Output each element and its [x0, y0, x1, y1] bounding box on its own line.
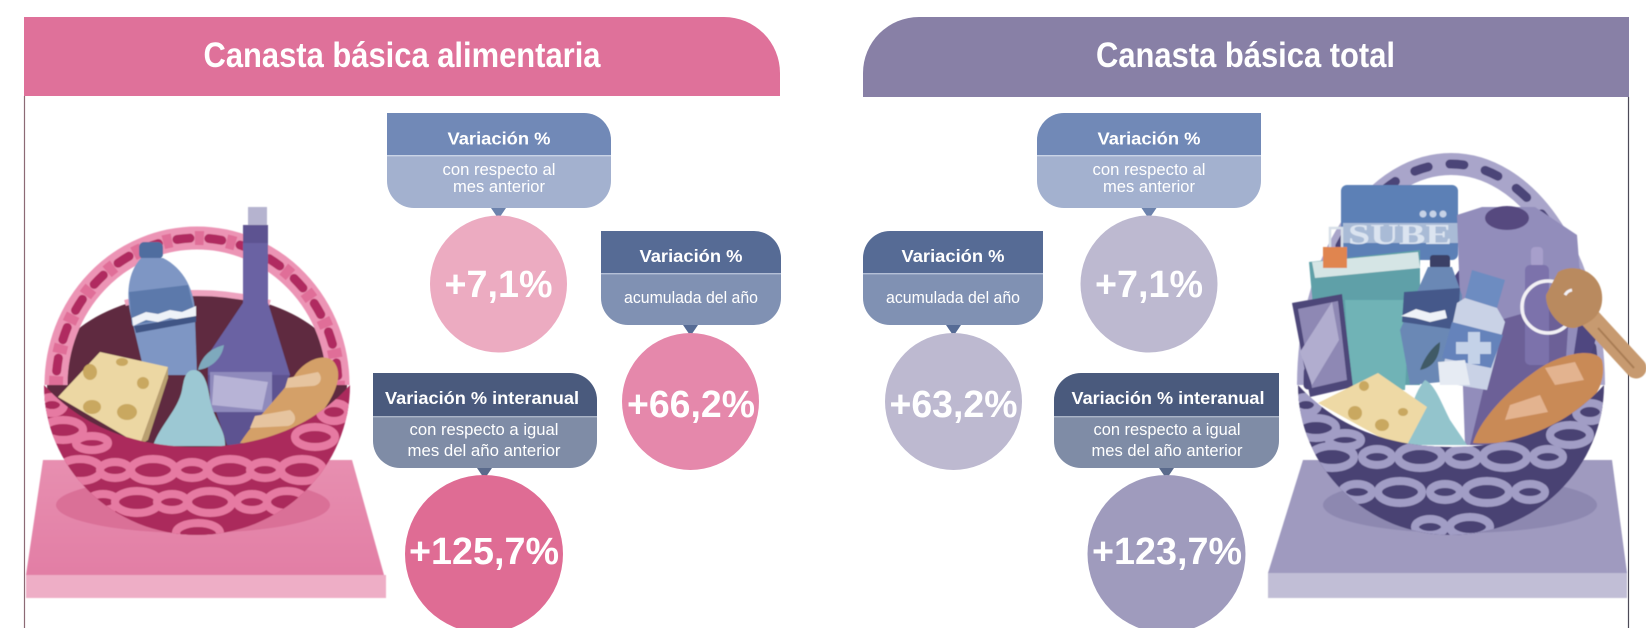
heading banner: total — [863, 17, 1629, 97]
callout: variación interanual alimentaria: Variación % interanual — [385, 388, 579, 408]
SUBE card — [1341, 185, 1458, 260]
pear — [1405, 342, 1467, 445]
callout: variación mensual alimentaria — [387, 113, 611, 219]
callout: variación mensual total: mes anterior — [1103, 178, 1196, 196]
circle: +66,2% — [622, 333, 759, 470]
SUBE card: SUBE — [1348, 220, 1452, 251]
callout: variación interanual total: con respecto a igual — [1094, 421, 1240, 439]
callout: variación mensual alimentaria: Variación % — [448, 128, 551, 148]
callout: variación mensual total — [1037, 113, 1261, 219]
callout: variación acumulada total: acumulada del año — [886, 289, 1020, 307]
illustration: full basket on purple table — [1268, 164, 1636, 598]
phone — [1292, 294, 1353, 397]
circle: +7,1% alimentaria: +7,1% — [444, 264, 552, 306]
callout: variación acumulada total: Variación % — [902, 246, 1005, 266]
callout: variación acumulada alimentaria — [601, 231, 781, 336]
callout: variación mensual total: Variación % — [1098, 128, 1201, 148]
heading banner: alimentaria: Canasta básica alimentaria — [204, 36, 601, 75]
basket front weave — [40, 385, 350, 543]
pear — [153, 345, 225, 446]
circle: +63,2%: +63,2% — [890, 384, 1018, 426]
callout: variación mensual alimentaria: mes anterior — [453, 178, 546, 196]
circle: +66,2%: +66,2% — [627, 384, 755, 426]
medicine bottle — [1438, 270, 1505, 390]
callout: variación interanual total — [1054, 373, 1279, 479]
table — [1268, 460, 1627, 598]
callout: variación acumulada total — [863, 231, 1043, 336]
table — [26, 460, 386, 598]
heading banner: alimentaria — [24, 17, 780, 96]
callout: variación interanual total: Variación % interanual — [1072, 388, 1264, 408]
bread — [240, 358, 338, 443]
panel: canasta básica alimentaria — [24, 17, 781, 633]
basket handle — [1308, 164, 1598, 400]
callout: variación interanual alimentaria: mes del año anterior — [408, 442, 561, 460]
water bottle — [128, 242, 197, 375]
circle: +7,1% total: +7,1% — [1095, 264, 1203, 306]
callout: variación interanual alimentaria: con respecto a igual — [410, 421, 558, 439]
heading banner: total: Canasta básica total — [1096, 36, 1395, 75]
callout: variación mensual alimentaria: con respecto al — [442, 161, 556, 179]
circle: +125,7% — [405, 475, 563, 633]
callout: variación acumulada alimentaria: acumulada del año — [624, 289, 758, 307]
illustration: food basket on pink table — [26, 207, 386, 598]
basket front weave — [1294, 385, 1604, 537]
cheese — [1318, 373, 1427, 445]
bread — [1473, 353, 1603, 443]
callout: variación interanual alimentaria — [373, 373, 597, 479]
wine bottle — [208, 207, 290, 445]
callout: variación mensual total: con respecto al — [1092, 161, 1206, 179]
circle: +63,2% — [885, 333, 1022, 470]
t-shirt — [1457, 206, 1582, 445]
basket back and handle — [47, 238, 347, 477]
book — [1309, 228, 1420, 390]
keys — [1522, 268, 1636, 368]
circle: +123,7% — [1088, 475, 1246, 633]
panel: canasta básica total — [863, 17, 1636, 633]
cheese — [58, 352, 168, 445]
circle: +125,7%: +125,7% — [409, 531, 559, 573]
circle: +7,1% total — [1080, 216, 1218, 352]
callout: variación interanual total: mes del año anterior — [1092, 442, 1243, 460]
callout: variación acumulada alimentaria: Variación % — [640, 246, 743, 266]
circle: +7,1% alimentaria — [430, 216, 567, 352]
circle: +123,7%: +123,7% — [1092, 531, 1242, 573]
water bottle — [1400, 255, 1462, 385]
perfume bottle — [1525, 247, 1549, 365]
